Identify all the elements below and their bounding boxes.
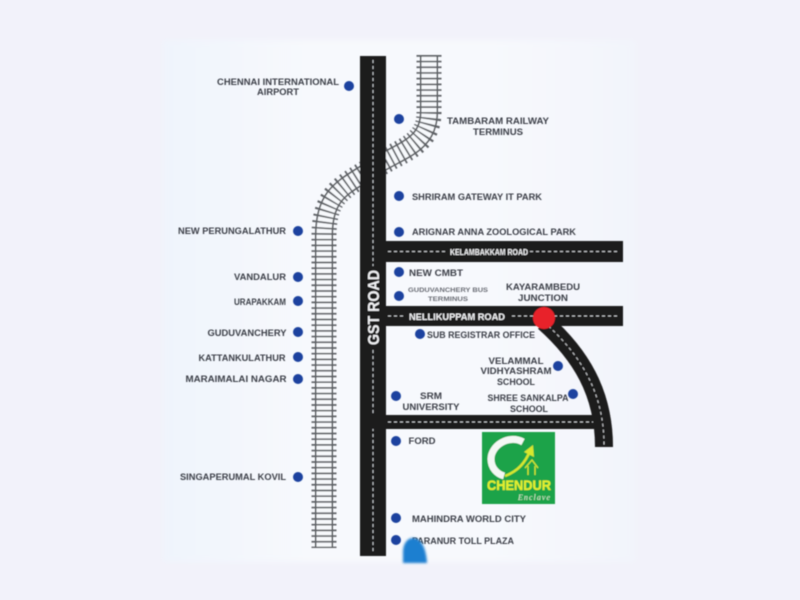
right labels: JUNCTION bbox=[518, 293, 568, 303]
left labels: URAPAKKAM bbox=[234, 297, 286, 307]
right labels: KAYARAMBEDU bbox=[506, 282, 580, 292]
railway track bbox=[324, 55, 429, 548]
right labels: SRM bbox=[420, 391, 442, 401]
left labels: NEW PERUNGALATHUR bbox=[178, 226, 287, 236]
left labels: SINGAPERUMAL KOVIL bbox=[180, 472, 287, 482]
junction marker bbox=[533, 307, 555, 329]
road: Nellikuppam Road: NELLIKUPPAM ROAD bbox=[409, 312, 506, 322]
logo: Chendur Enclave bbox=[482, 432, 555, 504]
road: curved branch road bbox=[544, 322, 604, 447]
right labels: VIDHYASHRAM bbox=[480, 366, 552, 376]
road: GST Road bbox=[360, 56, 386, 556]
right labels: ARIGNAR ANNA ZOOLOGICAL PARK bbox=[412, 227, 577, 237]
map panel background bbox=[163, 40, 636, 562]
right labels: UNIVERSITY bbox=[402, 402, 460, 412]
logo: Chendur Enclave: CHENDUR bbox=[487, 477, 551, 493]
location dots bbox=[293, 81, 578, 545]
logo C ring bbox=[491, 439, 523, 476]
right labels: TERMINUS bbox=[473, 127, 523, 137]
road: lower link road bbox=[372, 415, 598, 429]
icon: blue figure bbox=[403, 538, 427, 563]
logo house bbox=[525, 460, 538, 475]
right labels: PARANUR TOLL PLAZA bbox=[412, 536, 514, 546]
right labels bbox=[402, 116, 580, 546]
right labels: TAMBARAM RAILWAY bbox=[447, 116, 549, 126]
right labels: SHREE SANKALPA bbox=[488, 393, 569, 403]
logo arrow bbox=[505, 451, 530, 476]
road: Kelambakkam Road bbox=[386, 241, 623, 262]
right labels: FORD bbox=[408, 436, 436, 446]
right labels: SUB REGISTRAR OFFICE bbox=[427, 330, 535, 340]
road: Nellikuppam Road bbox=[386, 306, 623, 326]
left labels bbox=[178, 77, 340, 482]
right labels: SHRIRAM GATEWAY IT PARK bbox=[412, 192, 543, 202]
left labels: KATTANKULATHUR bbox=[198, 353, 286, 363]
right labels: SCHOOL bbox=[497, 377, 535, 387]
left labels: MARAIMALAI NAGAR bbox=[186, 374, 287, 384]
right labels: GUDUVANCHERY BUS bbox=[408, 287, 489, 294]
left labels: CHENNAI INTERNATIONAL bbox=[217, 77, 340, 87]
right labels: MAHINDRA WORLD CITY bbox=[412, 514, 526, 524]
right labels: SCHOOL bbox=[510, 404, 548, 414]
road label: GST Road: GST ROAD bbox=[366, 270, 383, 345]
left labels: AIRPORT bbox=[257, 87, 300, 97]
right labels: VELAMMAL bbox=[488, 356, 544, 366]
left labels: GUDUVANCHERY bbox=[208, 328, 286, 338]
left labels: VANDALUR bbox=[234, 272, 287, 282]
road: Kelambakkam Road: KELAMBAKKAM ROAD bbox=[450, 248, 528, 257]
right labels: NEW CMBT bbox=[409, 268, 464, 278]
right labels: TERMINUS bbox=[428, 296, 469, 303]
logo: Chendur Enclave: Enclave bbox=[517, 493, 550, 502]
